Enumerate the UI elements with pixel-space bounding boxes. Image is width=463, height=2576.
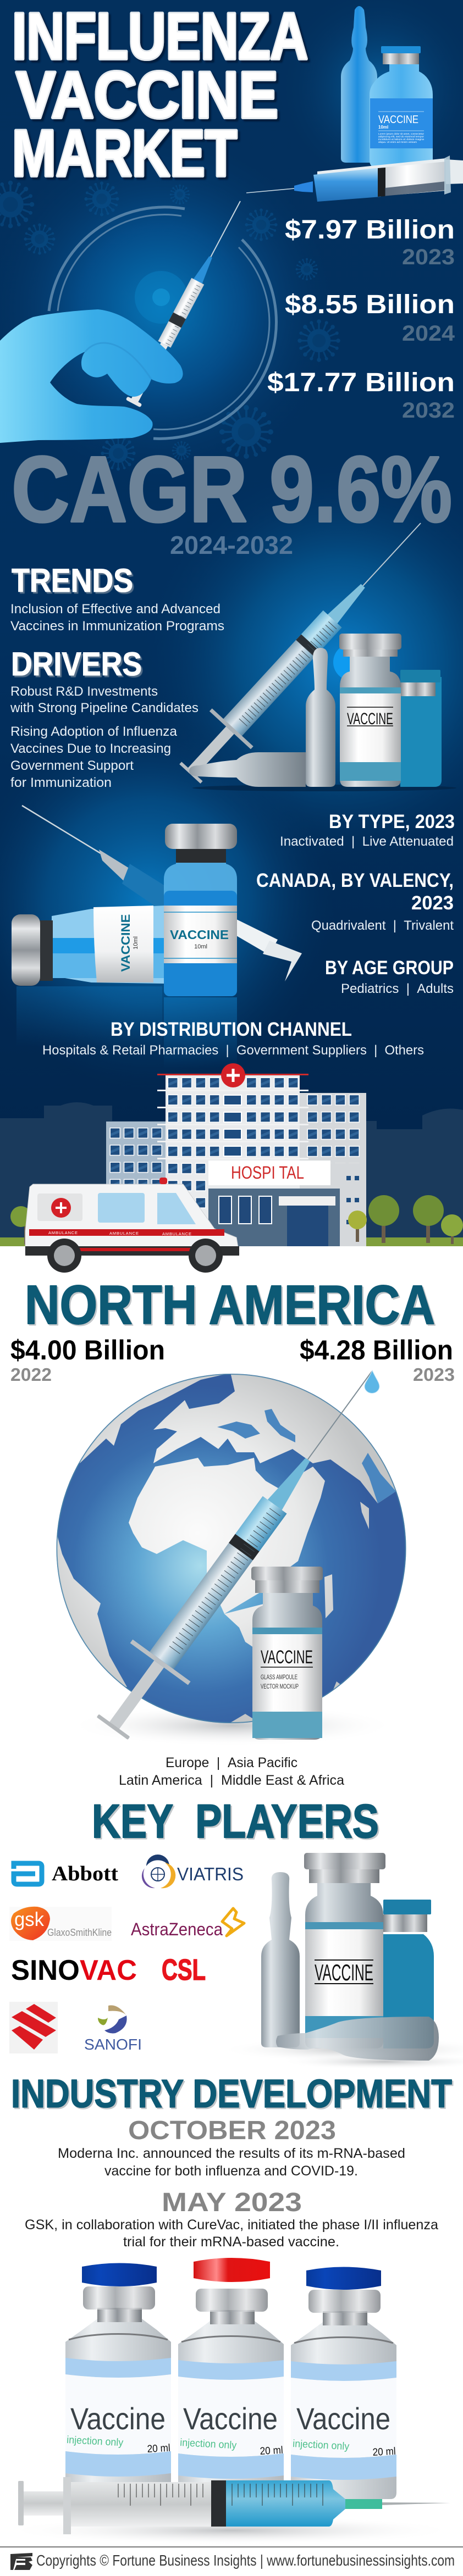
logo: CSL: CSL: [162, 1953, 206, 1986]
logo: Sanofi: [84, 2005, 142, 2053]
icon: ambulance: [25, 1178, 239, 1273]
icon: ampoule and vial top right: [341, 6, 433, 168]
vial one: 20 ml: [147, 2442, 170, 2455]
drivers section: DRIVERS: [11, 646, 142, 682]
drivers section: Rising Adoption of Influenza: [10, 724, 178, 739]
trends section: Inclusion of Effective and Advanced: [10, 602, 221, 617]
icon: water drop: [365, 1370, 379, 1393]
icon: horizontal syringe top right: [246, 156, 463, 202]
distribution channel: BY DISTRIBUTION CHANNEL: [111, 1019, 352, 1040]
vial one: injection only: [67, 2434, 124, 2449]
title: MARKET: [12, 116, 237, 190]
icon: glass ampoule vial: GLASS AMPOULE: [261, 1673, 297, 1681]
city skyline silhouette and ground: [0, 1102, 463, 2576]
trends section: [10, 562, 224, 634]
vial two: injection only: [180, 2437, 237, 2451]
market values: [267, 215, 455, 423]
icon: vaccine vials and syringe: VACCINE: [170, 928, 229, 942]
vial three: Vaccine: [296, 2401, 390, 2436]
other regions: Latin America | Middle East & Africa: [119, 1773, 344, 1788]
drivers section: [10, 646, 199, 790]
drivers section: with Strong Pipeline Candidates: [10, 701, 199, 715]
icon: glass ampoule vial: [251, 1567, 323, 1740]
development: October 2023: vaccine for both influenza and COVID-19.: [104, 2163, 358, 2179]
market values: 2024: [402, 321, 455, 346]
icon: glass ampoule vial: VACCINE: [261, 1647, 313, 1668]
vial two: 20 ml: [260, 2445, 283, 2457]
circular arcs around hand: [49, 207, 276, 438]
regional values: 2023: [413, 1364, 455, 1385]
drivers section: Robust R&D Investments: [10, 684, 158, 699]
regional values: [10, 1335, 455, 1385]
development: October 2023: [58, 2116, 405, 2179]
icon: vaccine vials and syringe: VACCINE: [119, 914, 133, 971]
market values: $7.97 Billion: [285, 215, 455, 245]
icon: vaccine vials and syringe: 10ml: [133, 936, 139, 950]
development: May 2023: MAY 2023: [162, 2188, 302, 2217]
vial three: 20 ml: [372, 2446, 396, 2458]
icon: ambulance: AMBULANCE: [162, 1231, 191, 1236]
title: VACCINE: [16, 58, 278, 132]
vial one: [65, 2263, 171, 2496]
other regions: [119, 1755, 344, 1788]
drivers section: Vaccines Due to Increasing: [10, 741, 171, 756]
segment labels by type, valency, age: [256, 811, 455, 996]
drivers section: for Immunization: [10, 775, 112, 790]
vial three: [291, 2267, 396, 2499]
icon: vaccine vials and syringe: [12, 806, 302, 1069]
development: May 2023: GSK, in collaboration with CureVac, initiated the phase I/II influenza: [25, 2217, 438, 2233]
icon: tilted syringe with vials: VACCINE: [347, 710, 393, 728]
development: October 2023: Moderna Inc. announced the results of its m-RNA-based: [58, 2146, 405, 2161]
footer logo: [10, 2553, 32, 2570]
segment labels by type, valency, age: 2023: [411, 892, 454, 914]
development: October 2023: OCTOBER 2023: [128, 2116, 336, 2145]
segment labels by type, valency, age: Inactivated | Live Attenuated: [280, 834, 454, 849]
logo: Suzuki: [9, 2002, 58, 2053]
logo: AstraZeneca: AstraZeneca: [131, 1919, 223, 1939]
logo: Sinovac: SINOVAC: [11, 1955, 137, 1986]
market values: 2032: [402, 398, 455, 423]
logo: Abbott: Abbott: [52, 1862, 118, 1885]
regional values: $4.28 Billion: [300, 1335, 453, 1365]
icon: vaccine vials and syringe: 10ml: [194, 943, 207, 950]
logo: AstraZeneca: [131, 1908, 244, 1939]
icon: tilted syringe with vials: [169, 504, 456, 793]
logo: GSK: gsk: [14, 1908, 45, 1930]
vial two: [178, 2258, 284, 2498]
icon: glass ampoule vial: VECTOR MOCKUP: [261, 1683, 299, 1690]
logo: Viatris: VIATRIS: [177, 1864, 244, 1884]
vial one: Vaccine: [70, 2401, 166, 2436]
segment labels by type, valency, age: Pediatrics | Adults: [341, 981, 454, 996]
icon: syringe held in hand: [126, 197, 247, 408]
regional values: $4.00 Billion: [10, 1335, 165, 1365]
trends section: TRENDS: [12, 562, 133, 599]
icon: ampoule and vial top right: VACCINE: [378, 114, 418, 126]
icon: hospital building: [106, 1063, 366, 1246]
title: [12, 0, 308, 190]
segment labels by type, valency, age: BY TYPE, 2023: [329, 811, 455, 832]
logo: Viatris: [142, 1855, 244, 1888]
icon: ampoule and vial top right: incididunt ut labore et dolore magna: [378, 138, 424, 141]
icon: hospital building: HOSPI TAL: [231, 1163, 304, 1182]
distribution channel: Hospitals & Retail Pharmacies | Government Suppliers | Others: [42, 1043, 424, 1058]
CAGR figure: 2024-2032: [170, 531, 293, 559]
market values: 2023: [402, 245, 455, 269]
logo: GSK: [9, 1907, 112, 1941]
icon: globe: [56, 1374, 406, 1739]
segment labels by type, valency, age: Quadrivalent | Trivalent: [311, 918, 454, 933]
icon: syringe on globe: [83, 1351, 401, 1750]
market values: $8.55 Billion: [285, 290, 455, 319]
heading: Key Players: KEY PLAYERS: [92, 1795, 379, 1848]
logo: Abbott: [14, 1862, 118, 1885]
logo: GSK: GlaxoSmithKline: [47, 1927, 112, 1938]
market values: $17.77 Billion: [267, 368, 455, 397]
icon: ampoule and vial top right: Lorem ipsum dolor sit amet, consectetur: [378, 132, 424, 135]
distribution channel: [42, 1019, 424, 1058]
vial three: injection only: [293, 2438, 350, 2452]
icon: vials beside key players: VACCINE: [315, 1959, 373, 1985]
other regions: Europe | Asia Pacific: [166, 1755, 297, 1770]
icon: trees: [10, 1195, 463, 1245]
icon: three vaccine vials: [65, 2258, 396, 2499]
icon: ambulance: AMBULANCE: [48, 1230, 78, 1235]
vial two: Vaccine: [183, 2401, 278, 2436]
development: May 2023: [25, 2188, 438, 2250]
icon: horizontal syringe bottom: [5, 2477, 456, 2545]
trends section: Vaccines in Immunization Programs: [10, 619, 224, 634]
drivers section: Government Support: [10, 758, 134, 773]
icon: vials beside key players: [220, 1853, 463, 2069]
icon: ampoule and vial top right: aliqua. Ut enim ad minim veniam: [378, 141, 417, 143]
icon: ambulance: AMBULANCE: [109, 1231, 139, 1236]
icon: blue gloved hand: [0, 309, 183, 443]
footer rule: [0, 2546, 463, 2547]
logo: Sanofi: SANOFI: [84, 2036, 142, 2053]
icon: ampoule and vial top right: 10ml: [378, 125, 388, 130]
development: May 2023: trial for their mRNA-based vaccine.: [123, 2234, 339, 2250]
icon: ampoule and vial top right: adipiscing elit, sed do eiusmod tempor: [378, 135, 424, 138]
title: INFLUENZA: [12, 0, 308, 73]
regional values: 2022: [10, 1364, 52, 1385]
dark blue background panel: [0, 0, 463, 1247]
virus background icons: [0, 181, 340, 471]
